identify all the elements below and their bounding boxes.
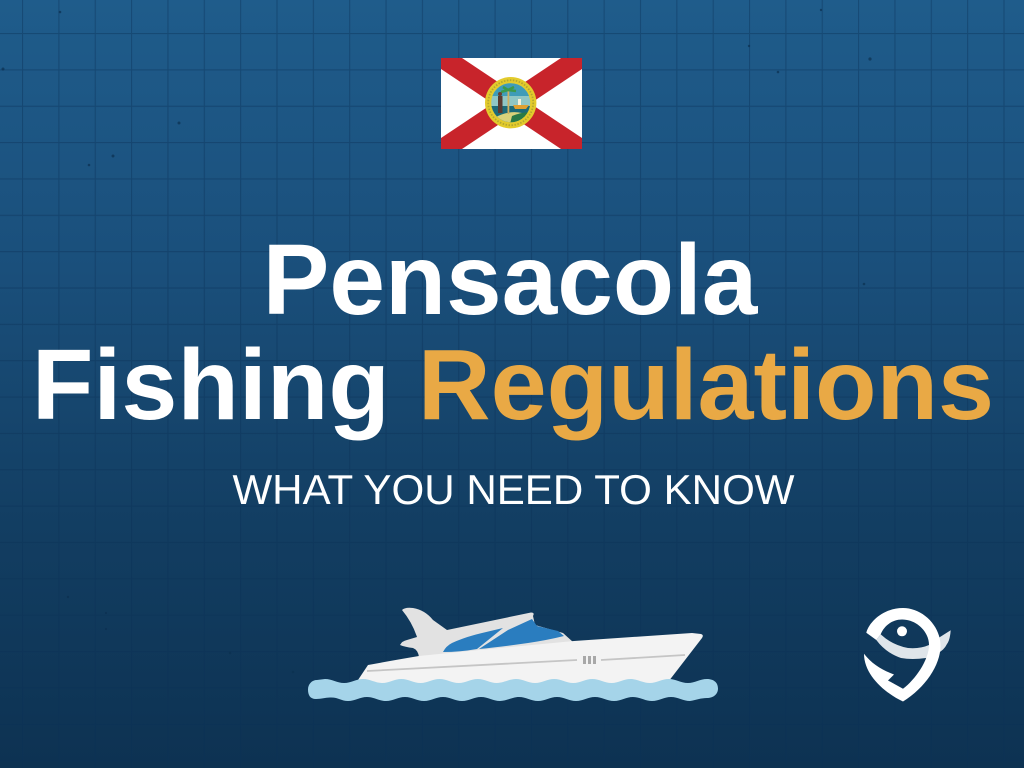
boat windows <box>443 619 564 652</box>
water waves <box>308 679 718 701</box>
icon: boat on water <box>308 608 718 701</box>
logo white body <box>864 608 940 702</box>
hull stripe <box>367 655 685 671</box>
title line: Fishing Regulations: Fishing Regulations <box>32 329 994 441</box>
logo gray fin band <box>876 630 951 659</box>
boat upper deck and fin <box>400 608 573 657</box>
icon: state seal <box>485 77 536 128</box>
title line: Pensacola: Pensacola <box>263 224 759 336</box>
icon: Florida state flag <box>441 58 582 149</box>
subtitle: WHAT YOU NEED TO KNOW <box>232 466 795 513</box>
logo fish eye <box>897 626 907 636</box>
hull vents <box>584 656 594 664</box>
icon: fish hook logo <box>864 608 951 702</box>
boat hull <box>354 633 703 686</box>
